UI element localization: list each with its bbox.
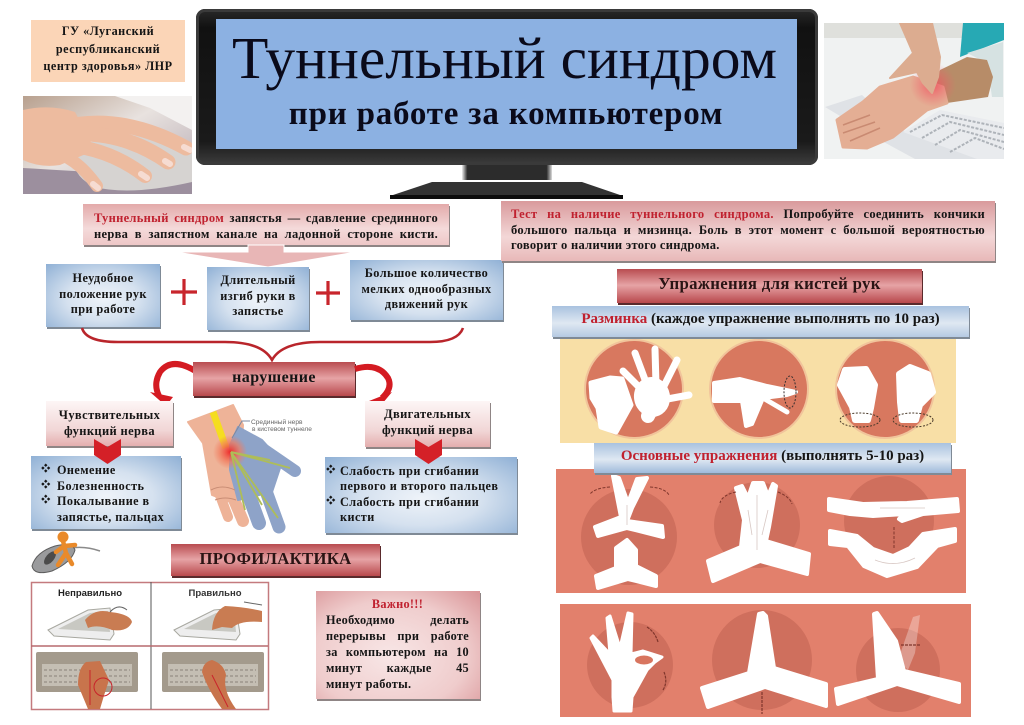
cause: uncomfortable position: положение рук [59,286,147,300]
curved arrow left [150,360,193,401]
test box: большого пальца и мизинца. Боль в этот момент с большой вероятностью [511,222,985,236]
sensory symptoms list: ❖ [41,465,51,475]
main exercises heading [594,443,951,473]
cause: long wrist bend: запястье [232,304,284,318]
cause: uncomfortable position: Неудобное [73,271,133,285]
exercise: fists rotation [840,367,933,420]
curved arrow right [354,364,393,401]
sensory symptoms list: ❖ [41,481,51,491]
warm-up exercises panel [560,339,956,443]
sensory symptoms list [31,456,181,529]
photo: wrist pain at keyboard [824,23,1004,159]
test box [501,201,995,261]
motor symptoms list: кисти [340,510,375,524]
nerve callout text: Срединный нерв [251,418,303,426]
cause: repetitive movements: движений рук [385,297,468,311]
label: wrong: Неправильно [58,588,122,599]
important note: Необходимо делать [326,613,469,627]
definition box [83,204,449,245]
motor symptoms list: ❖ [326,466,336,476]
motor symptoms list [325,457,517,533]
sensory functions box: функций нерва [64,424,155,438]
exercise: finger spread and clasp [595,476,663,588]
important note: за компьютером на 10 [326,645,469,659]
definition box: Туннельный синдром запястья — сдавление срединного [94,211,438,225]
sensory symptoms list: Болезненность [57,479,144,493]
photo: hand on computer mouse [23,96,192,194]
subtitle: при работе за компьютером [289,96,723,132]
monitor stand [390,165,623,199]
exercise: palms tilted [836,613,959,704]
important note: минут каждые 45 [326,661,469,675]
exercise detail lines [627,495,925,564]
exercises heading: Упражнения для кистей рук [658,274,881,293]
cause: long wrist bend [207,267,309,330]
arrow from definition to causes [182,244,350,266]
cause: repetitive movements: Большое количество [365,266,488,280]
sensory symptoms list: запястье, пальцах [57,510,164,524]
motor functions box: функций нерва [382,422,473,436]
main exercises panel 2 [560,604,971,717]
chevron left [94,439,121,464]
cause: long wrist bend: изгиб руки в [220,288,296,302]
exercises heading [617,269,922,303]
sensory functions box: Чувствительных [59,408,160,422]
important note [316,591,480,699]
motor symptoms list: Слабость при сгибании [340,495,479,509]
test box: Тест на наличие туннельного синдрома. Попробуйте соединить кончики [511,207,985,221]
exercise: ok sign [591,613,662,711]
main exercises panel 1 [556,469,966,593]
main exercises heading: Основные упражнения (выполнять 5-10 раз) [621,448,924,464]
cause: repetitive movements [350,260,503,320]
warm-up heading: Разминка (каждое упражнение выполнять по 10 раз) [581,311,940,327]
nerve callout text: в кистевом туннеле [252,426,312,433]
exercise: wrist rotation [714,379,796,426]
cause: uncomfortable position [46,264,160,327]
exercise: hands side curve [829,499,958,576]
test box: говорит о наличии этого синдрома. [511,238,720,252]
brace joining causes [80,328,464,362]
monitor bezel [196,9,818,165]
computer monitor with title [196,9,818,199]
exercise arrows [647,627,920,714]
cause: long wrist bend: Длительный [220,273,296,287]
prevention heading [171,544,380,576]
important note: минут работы. [326,677,411,691]
cause: repetitive movements: мелких однообразных [361,282,492,296]
posture comparison grid [30,582,270,710]
sensory symptoms list: Покалывание в [57,494,150,508]
motor symptoms list: ❖ [326,497,336,507]
important note: перерывы при работе [326,629,469,643]
organization label: ГУ «Луганский [62,24,154,38]
organization label: республиканский [56,42,160,56]
motor symptoms list: Слабость при сгибании [340,464,479,478]
cause: uncomfortable position: при работе [71,302,135,316]
screen with heading [216,19,797,149]
icon: figure on computer mouse [32,532,100,574]
motor functions box: Двигательных [384,407,471,421]
sensory symptoms list: Онемение [57,463,116,477]
exercise: palms pressed [708,483,809,581]
disorder heading [193,362,355,396]
organization label: центр здоровья» ЛНР [43,59,173,73]
motor functions box [365,401,490,447]
motor symptoms list: первого и второго пальцев [340,479,498,493]
important note: Важно!!! [372,597,423,611]
sensory symptoms list: ❖ [41,496,51,506]
plus sign [316,281,340,305]
nerve callout text [232,418,312,438]
chevron right [415,439,442,464]
disorder heading: нарушение [232,369,316,386]
organization label [31,20,185,82]
hand anatomy illustration [187,404,312,534]
sensory functions box [46,401,173,446]
main title: Туннельный синдром [232,25,777,91]
prevention heading: ПРОФИЛАКТИКА [199,549,352,568]
definition box: нерва в запястном канале на ладонной стороне кисти. [94,226,438,240]
plus sign [171,279,197,305]
exercise: palms down [702,613,826,707]
exercise arrows [590,487,894,549]
warm-up heading [552,306,969,337]
exercise: fist and open hand [591,349,689,432]
label: right: Правильно [188,588,242,599]
